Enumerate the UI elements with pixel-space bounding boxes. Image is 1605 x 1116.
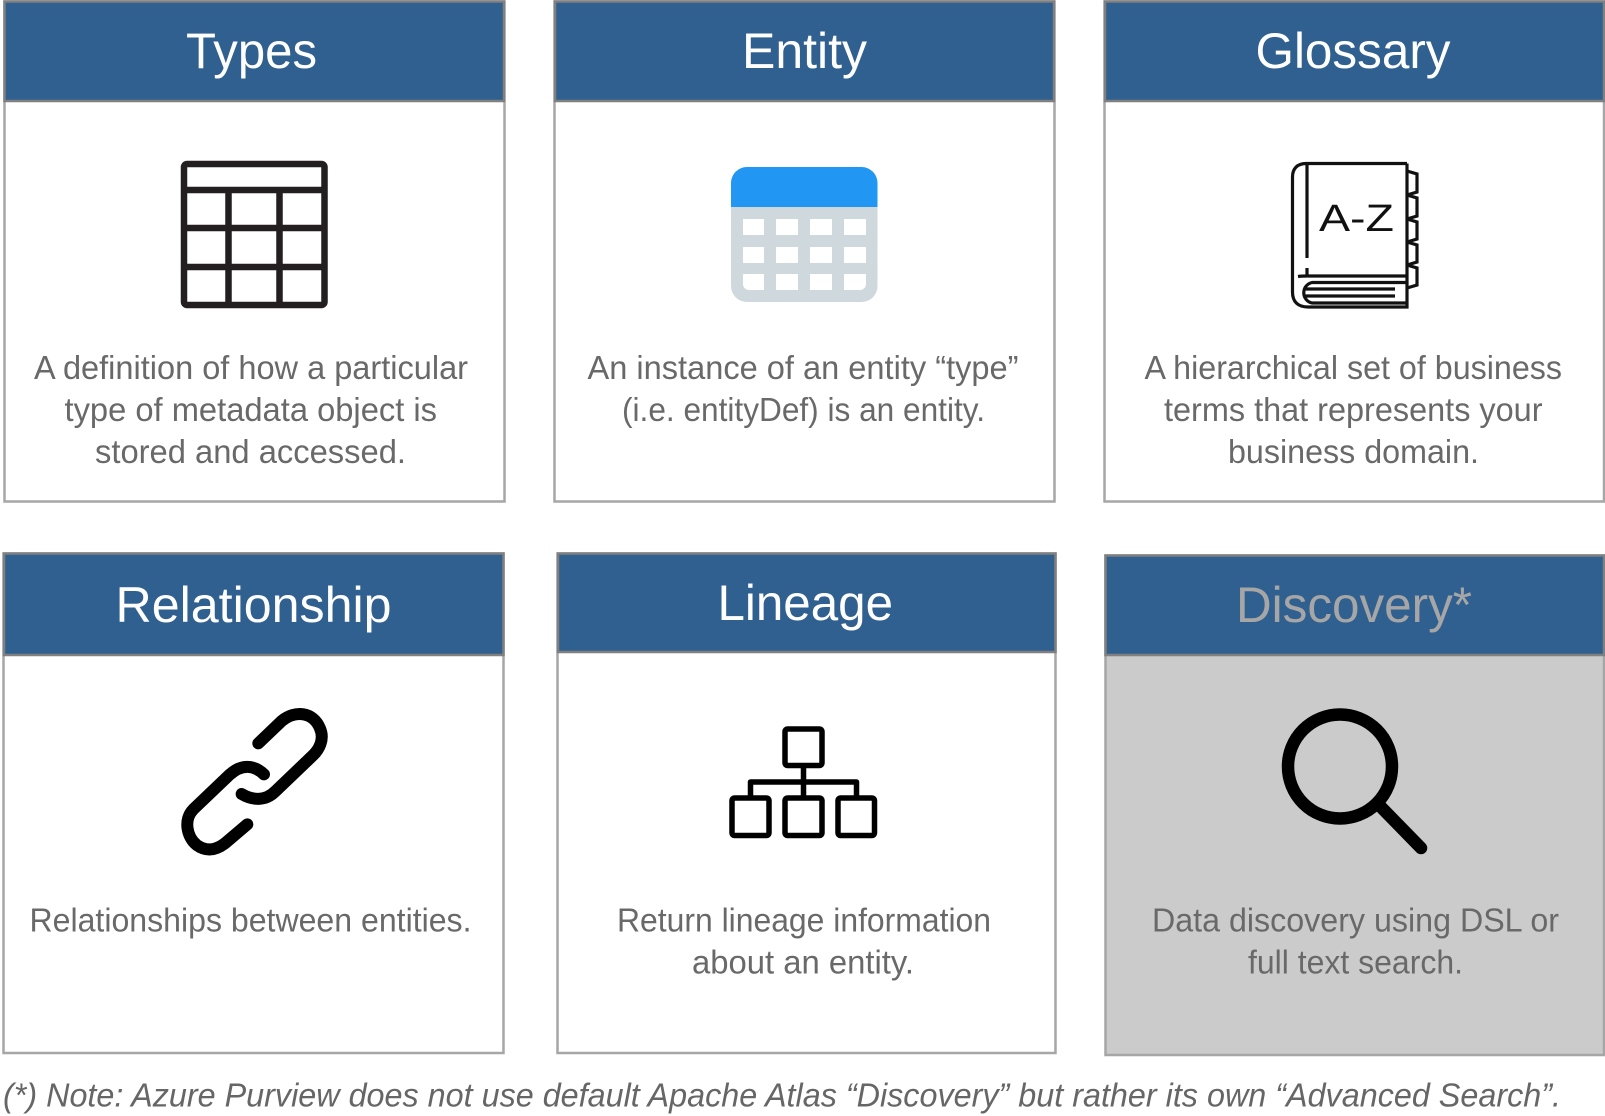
text: Types description	[34, 349, 468, 470]
panel: Entity	[554, 2, 1054, 502]
text: Glossary description: terms that represents your	[1164, 391, 1543, 428]
footnote: (*) Note: Azure Purview does not use default Apache Atlas “Discovery” but rather its own “Advanced Search”.	[3, 1076, 1561, 1114]
icon: hierarchy	[732, 729, 874, 836]
panel: Lineage	[558, 554, 1056, 1053]
text: Entity description: An instance of an entity “type”	[588, 349, 1018, 386]
heading: Lineage: Lineage	[718, 575, 893, 631]
heading: Types: Types	[186, 23, 317, 79]
text: Lineage description: about an entity.	[692, 944, 914, 980]
heading: Discovery	[1106, 556, 1604, 655]
text: Discovery description	[1152, 902, 1559, 980]
heading: Relationship	[4, 554, 504, 655]
icon: chain link	[187, 714, 322, 849]
icon: A-Z book	[1292, 163, 1417, 307]
heading: Discovery: Discovery*	[1236, 577, 1472, 633]
panel: Discovery	[1106, 556, 1604, 1055]
heading: Lineage	[558, 554, 1056, 652]
icon: calendar grid	[731, 167, 878, 302]
text: Glossary description: A hierarchical set of business	[1144, 349, 1562, 386]
heading: Glossary: Glossary	[1256, 23, 1450, 79]
heading: Entity	[555, 2, 1054, 101]
text: Relationship description: Relationships between entities.	[30, 902, 472, 938]
text: Entity description	[588, 349, 1018, 428]
text: Types description: stored and accessed.	[95, 433, 406, 470]
panel: Types	[4, 2, 504, 502]
text: Entity description: (i.e. entityDef) is an entity.	[622, 391, 985, 428]
text: Lineage description	[617, 902, 991, 980]
text: Discovery description: full text search.	[1248, 944, 1463, 980]
text: Lineage description: Return lineage information	[617, 902, 991, 938]
text: Glossary description	[1144, 349, 1562, 470]
text: Types description: type of metadata object is	[64, 391, 437, 428]
heading: Relationship: Relationship	[116, 577, 392, 633]
heading: Glossary	[1105, 2, 1604, 101]
text: Discovery description: Data discovery using DSL or	[1152, 902, 1559, 938]
panel: Relationship	[4, 554, 504, 1053]
panel: Glossary	[1104, 2, 1604, 502]
icon: table	[184, 164, 324, 305]
text: Types description: A definition of how a particular	[34, 349, 468, 386]
icon: magnifying glass	[1288, 714, 1421, 848]
icon: A-Z book: A-Z	[1319, 198, 1394, 240]
heading: Types	[4, 2, 504, 101]
heading: Entity: Entity	[742, 23, 867, 79]
text: Glossary description: business domain.	[1228, 433, 1479, 470]
